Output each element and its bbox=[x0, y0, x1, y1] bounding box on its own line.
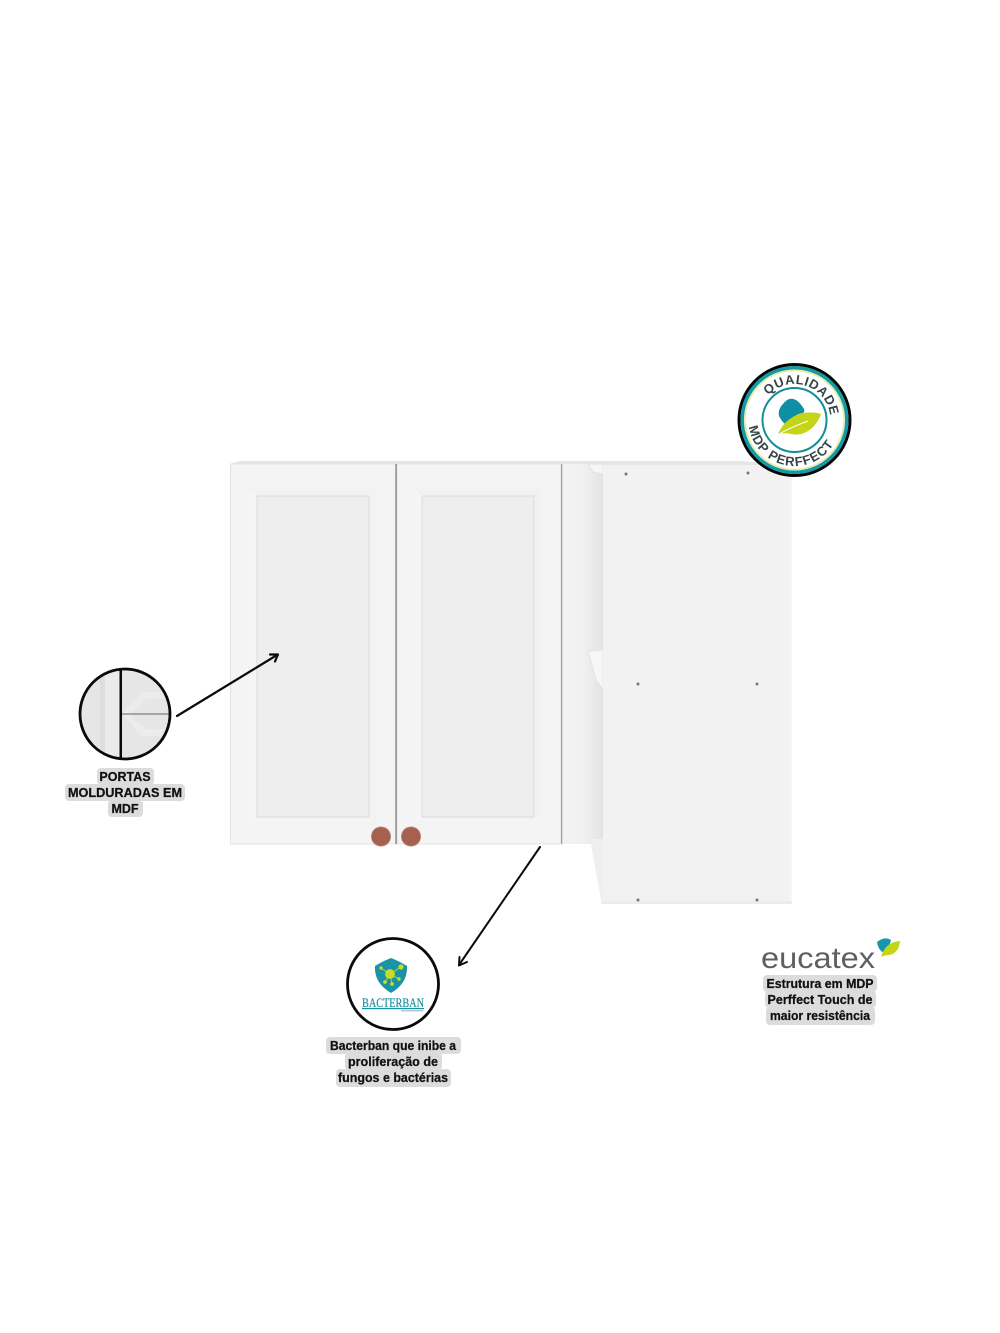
arrow bbox=[177, 654, 278, 716]
door knobs bbox=[371, 826, 421, 846]
badge leaves bbox=[779, 399, 804, 425]
left door bbox=[230, 464, 396, 844]
shield icon bbox=[375, 958, 407, 993]
Eucatex logo: eucatex bbox=[761, 942, 875, 975]
cabinet top edge bbox=[230, 461, 792, 465]
label: MDF bbox=[111, 802, 139, 816]
right door bbox=[397, 464, 561, 844]
label: maior resistência bbox=[770, 1009, 871, 1023]
label bbox=[65, 768, 185, 817]
callout: Bacterban bbox=[326, 847, 540, 1087]
arrow bbox=[459, 847, 540, 966]
Bacterban logo circle bbox=[348, 938, 438, 1030]
door gaps bbox=[396, 464, 562, 844]
label bbox=[326, 1037, 461, 1087]
side panel bbox=[601, 465, 792, 904]
cabinet illustration bbox=[230, 461, 792, 904]
quality badge: MDP Perffect bbox=[738, 363, 852, 477]
badge text: QUALIDADE bbox=[764, 375, 839, 415]
label: MOLDURADAS EM bbox=[68, 786, 182, 800]
label: Perffect Touch de bbox=[768, 993, 873, 1007]
label: Bacterban que inibe a bbox=[330, 1039, 457, 1053]
label: PORTAS bbox=[99, 770, 151, 784]
label bbox=[763, 975, 877, 1025]
label: fungos e bactérias bbox=[338, 1071, 448, 1085]
corner side section bbox=[562, 464, 603, 904]
callout: molded doors bbox=[65, 654, 278, 817]
Bacterban wordmark: BACTERBAN bbox=[362, 995, 424, 1010]
zoom circle icon bbox=[80, 665, 171, 765]
label: Estrutura em MDP bbox=[766, 977, 874, 991]
callout: Eucatex structure bbox=[761, 938, 900, 1025]
quality badge: MDP Perffect: MDP PERFFECT bbox=[748, 425, 832, 466]
label: proliferação de bbox=[348, 1055, 438, 1069]
